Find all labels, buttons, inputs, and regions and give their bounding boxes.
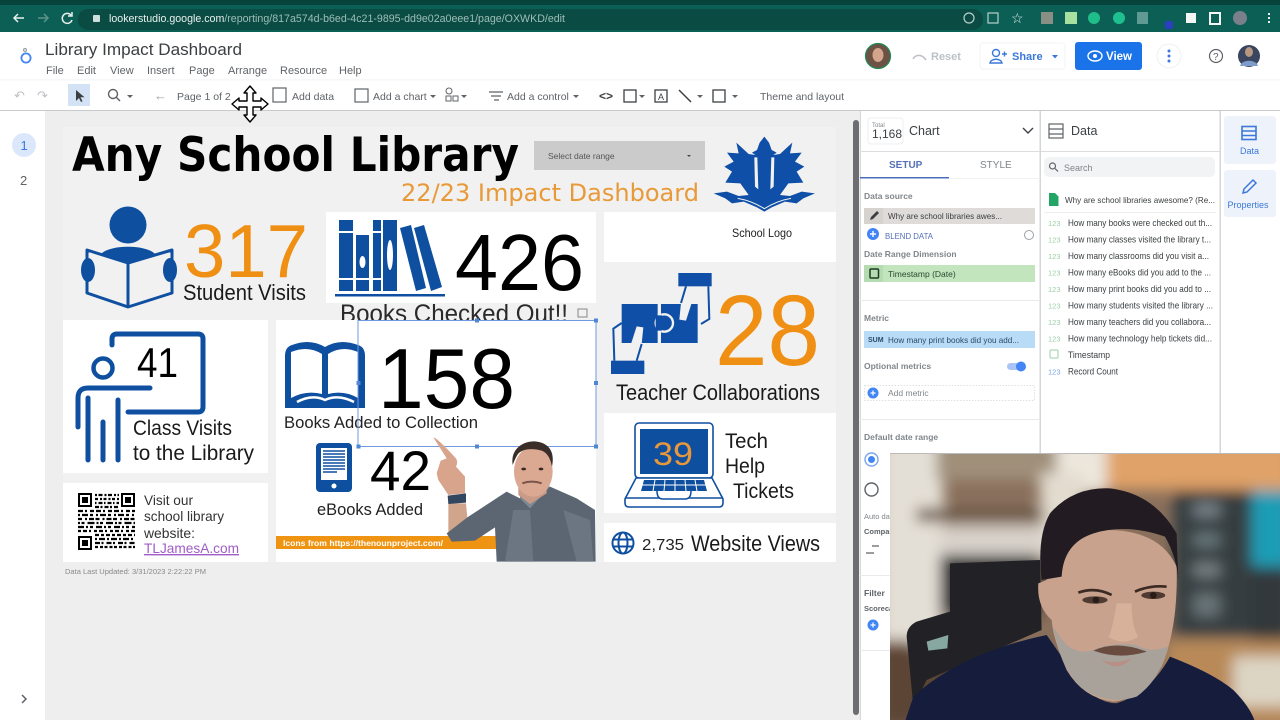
panel: website QR	[63, 483, 268, 562]
icon: globe	[612, 532, 634, 554]
data source section	[864, 191, 1035, 241]
watch band	[448, 493, 466, 504]
presenter shirt	[905, 635, 1255, 720]
menu bar: Page	[189, 65, 215, 77]
field list: 123	[1048, 334, 1061, 344]
metric label: Books Added to Collection	[284, 413, 478, 432]
icon: teacher at board	[78, 334, 203, 460]
canvas background	[45, 111, 860, 720]
panel: school logo	[604, 137, 836, 262]
scorecard thumbnail: 1,168	[872, 127, 902, 141]
metric section: How many print books did you add...	[888, 335, 1019, 345]
date range dimension	[864, 249, 1035, 282]
field list: How many classes visited the library t...	[1068, 234, 1211, 246]
metric label: Tickets	[733, 480, 794, 503]
metric section: Add metric	[888, 388, 929, 398]
logo caption: School Logo	[732, 226, 792, 240]
source row	[1044, 193, 1216, 213]
metric value: 317	[184, 209, 308, 293]
left page rail: 1	[20, 138, 28, 153]
presenter pointing	[433, 437, 596, 562]
field list: How many print books did you add to ...	[1068, 284, 1211, 295]
field list: 123	[1048, 268, 1061, 278]
date range control	[534, 141, 705, 170]
website text	[143, 492, 239, 556]
icon: QR code	[78, 494, 135, 549]
scorecard thumbnail	[868, 118, 903, 144]
filter section	[860, 588, 894, 651]
menu bar	[46, 65, 362, 77]
metric label	[725, 430, 794, 503]
move cursor	[232, 86, 268, 122]
share button	[980, 43, 1065, 69]
panel: books added	[276, 320, 596, 562]
metric value: 42	[370, 439, 431, 502]
search box: Search	[1064, 163, 1093, 173]
toolbar: ←	[154, 88, 167, 103]
reset button: Reset	[931, 51, 961, 63]
setup and style tabs: STYLE	[980, 160, 1012, 171]
metric label: Help	[725, 455, 765, 478]
user avatar	[1238, 45, 1260, 67]
browser bar: lookerstudio.google.com/reporting/817a574d-b6ed-4c21-9895-dd9e02a0eee1/page/OXWKD/edit	[109, 13, 565, 25]
collaborator avatar	[866, 44, 890, 68]
left page rail: 2	[20, 173, 27, 188]
metric value: 2,735	[642, 537, 684, 554]
icon: open book	[285, 342, 365, 408]
app header	[21, 41, 1260, 77]
field list: How many books were checked out th...	[1068, 218, 1212, 229]
field list: 123	[1048, 285, 1061, 294]
browser bar	[0, 0, 1280, 32]
menu bar: Resource	[280, 65, 327, 77]
selection box	[356, 318, 598, 448]
help icon: ?	[1213, 52, 1219, 63]
metric section: SUM	[868, 337, 884, 344]
metric label: Books Checked Out!!	[340, 300, 568, 328]
website text: Visit our	[144, 492, 193, 508]
data tab: Data	[1240, 146, 1259, 156]
icon: looker logo	[21, 48, 31, 63]
left page rail	[12, 133, 36, 703]
field list: Timestamp	[1068, 350, 1110, 361]
neck and head	[518, 485, 547, 504]
metric value: 39	[653, 436, 693, 472]
panel: tech help tickets	[604, 413, 836, 513]
metric value: 426	[455, 218, 584, 307]
metric section: Metric	[864, 313, 889, 323]
field list: How many eBooks did you add to the ...	[1068, 268, 1211, 278]
metric label: Tech	[725, 430, 768, 453]
field list: 123	[1048, 318, 1061, 327]
date range control: Select date range	[548, 151, 615, 161]
metric value: 41	[137, 339, 178, 386]
icon: data table	[1049, 124, 1063, 138]
source row: Why are school libraries awesome? (Re...	[1065, 195, 1215, 205]
data updated note: Data Last Updated: 3/31/2023 2:22:22 PM	[65, 567, 206, 576]
filter section: Scoreca	[864, 604, 894, 613]
setup and style tabs	[860, 160, 1040, 179]
date range dimension: Date Range Dimension	[864, 249, 957, 259]
toolbar: Add data	[292, 91, 334, 103]
panel: chart properties	[860, 111, 1041, 720]
toolbar: Add a control	[507, 91, 569, 103]
report sheet	[63, 127, 836, 562]
field list: How many students visited the library ...	[1068, 300, 1213, 312]
scrollbar	[853, 120, 859, 715]
filter section: Filter	[864, 588, 885, 598]
dashboard subtitle: 22/23 Impact Dashboard	[401, 179, 699, 207]
view button	[1075, 42, 1142, 70]
metric label: Teacher Collaborations	[616, 380, 820, 405]
menu bar: File	[46, 65, 64, 77]
chart toolbar icon	[578, 309, 587, 317]
default date range: Compar	[864, 527, 892, 536]
menu bar: Insert	[147, 65, 175, 77]
scorecard thumbnail: Total	[872, 123, 885, 129]
menu bar: View	[110, 65, 134, 77]
browser bar: ☆	[1011, 10, 1024, 26]
reset button	[913, 51, 961, 63]
field list: How many classrooms did you visit a...	[1068, 251, 1209, 262]
field list: How many technology help tickets did...	[1068, 334, 1212, 344]
setup and style tabs: SETUP	[889, 160, 923, 171]
more options	[1157, 44, 1181, 68]
default date range	[864, 432, 938, 553]
panel heading: Chart	[909, 124, 940, 138]
properties tab: Properties	[1228, 200, 1269, 210]
field list: 123	[1048, 236, 1061, 244]
panel: website views	[604, 523, 836, 562]
panel heading: Data	[1071, 124, 1097, 138]
metric label: Website Views	[691, 531, 820, 556]
credit bar	[276, 536, 590, 549]
metric label: Class Visits	[133, 417, 232, 440]
data source section: Why are school libraries awes...	[888, 211, 1002, 221]
website text: website:	[143, 525, 195, 541]
toolbar: Theme and layout	[760, 91, 844, 103]
icon: puzzle hands	[611, 273, 712, 374]
toolbar	[0, 80, 1280, 111]
website text: TLJamesA.com	[144, 540, 239, 556]
metric section: Optional metrics	[864, 361, 931, 371]
menu bar: Help	[339, 65, 362, 77]
pointing hand	[433, 437, 465, 495]
field list: How many teachers did you collabora...	[1068, 317, 1211, 328]
panel: books checked out	[326, 212, 596, 328]
shirt	[447, 487, 596, 562]
date range dimension: Timestamp (Date)	[888, 269, 956, 279]
search box	[1044, 157, 1215, 177]
field list: 123	[1048, 368, 1061, 376]
share button: Share	[1012, 51, 1043, 63]
field list	[1048, 218, 1213, 378]
presenter head	[1038, 488, 1178, 702]
toolbar: Add a chart	[373, 91, 427, 103]
icon: e-reader	[316, 443, 352, 492]
website text: school library	[144, 508, 224, 524]
metric label: eBooks Added	[317, 500, 423, 519]
default date range: Auto dat	[864, 512, 893, 521]
view button: View	[1106, 51, 1132, 63]
toolbar: ↶	[14, 89, 25, 104]
icon: bookshelf	[335, 220, 445, 296]
blurred room background	[880, 440, 1280, 720]
forearm	[448, 503, 467, 534]
toolbar: ↷	[37, 89, 49, 104]
icon: school logo	[714, 137, 815, 212]
webcam presenter video	[890, 453, 1280, 720]
panel: data fields	[1041, 111, 1221, 454]
icon: laptop	[625, 423, 723, 507]
toolbar: A	[658, 92, 664, 102]
metric label: Student Visits	[183, 280, 306, 305]
help icon	[1210, 50, 1222, 63]
panel: class visits	[63, 320, 268, 473]
panel: class visits: to the Library	[133, 442, 254, 465]
icon: reader	[81, 206, 177, 307]
dashboard title: Any School Library	[72, 128, 519, 183]
metric value: 28	[715, 275, 820, 387]
toolbar: Page 1 of 2	[177, 91, 231, 103]
office chair	[907, 560, 1042, 707]
menu bar: Arrange	[228, 65, 267, 77]
toolbar: <>	[599, 89, 613, 103]
menu bar: Edit	[77, 65, 96, 77]
panel: student visits	[81, 206, 308, 307]
metric section	[864, 313, 1035, 400]
right tab rail	[1224, 116, 1276, 217]
data source section: Data source	[864, 191, 913, 201]
field list: 123	[1048, 252, 1061, 261]
field list: Record Count	[1068, 366, 1118, 378]
report title: Library Impact Dashboard	[45, 41, 242, 59]
credit bar: Icons from https://thenounproject.com/	[283, 538, 444, 548]
panel: teacher collaborations	[611, 273, 820, 405]
data source section: BLEND DATA	[885, 231, 933, 241]
default date range: Default date range	[864, 432, 938, 442]
field list: 123	[1048, 219, 1061, 228]
metric value: 158	[378, 332, 515, 427]
field list: 123	[1048, 302, 1061, 310]
